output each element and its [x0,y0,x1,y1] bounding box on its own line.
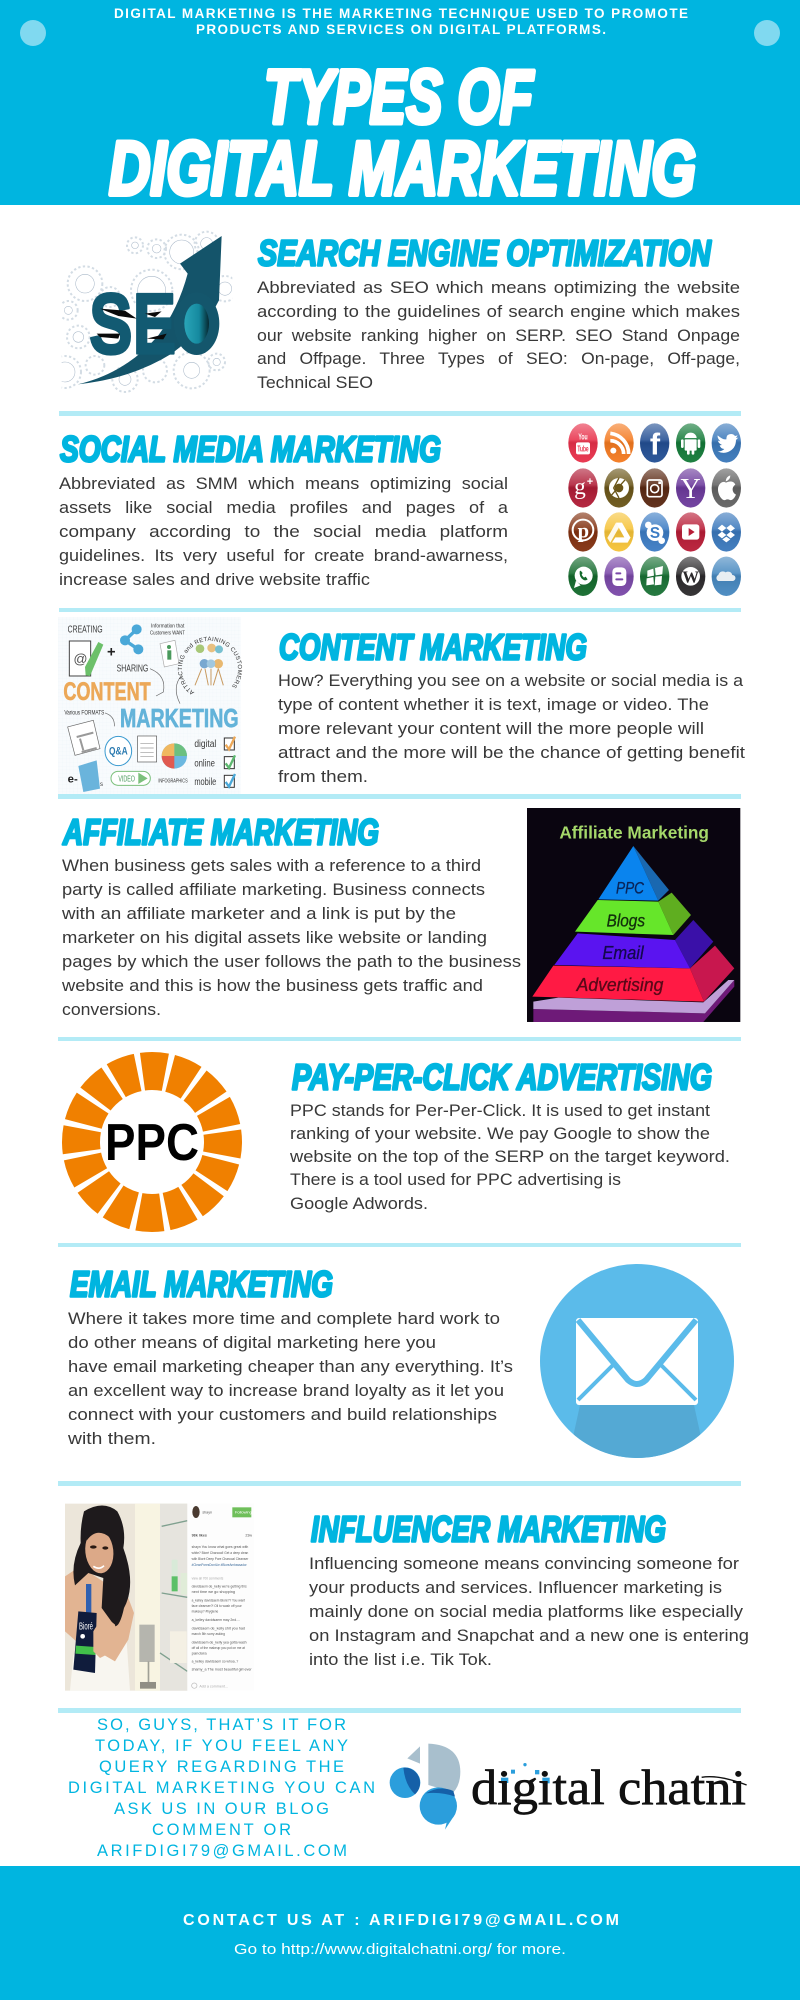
body text [309,1555,749,1669]
icon: rss [604,423,634,463]
body text [289,1102,730,1213]
tier: email [554,920,713,968]
icon: google plus [568,468,598,508]
instagram side panel: shayn [202,1510,212,1514]
image: content marketing sketch: @ [73,651,88,667]
image: content marketing sketch: ATTRACTING and RETAINING CUSTOMERS [178,636,242,694]
product bottle: Bioré [79,1622,93,1633]
intro text [114,6,688,37]
panel: affiliate marketing [61,808,740,1022]
website line: Go to http://www.digitalchatni.org/ for more. [234,1941,566,1958]
icon: google drive [604,512,634,552]
tier: advertising [532,946,734,1002]
body text: Abbreviated as SMM which means optimizing social [59,475,508,493]
panel: influencer marketing [65,1504,749,1691]
body text [257,279,740,392]
image: content marketing sketch: mobile [194,777,217,788]
icon: dropbox [712,512,741,552]
image: content marketing sketch [58,617,242,794]
image: content marketing sketch: Information that [151,624,185,630]
icon: pinterest [568,512,598,552]
instagram side panel: off all of the makeup you put on me at [192,1646,245,1650]
closing message: COMMENT OR [152,1821,291,1839]
icon: blogger [604,557,634,596]
title [109,55,696,212]
logo mark [390,1744,460,1830]
body text: with an affiliate marketer and a link is put by the [61,905,456,923]
panel: search engine optimization [49,232,740,392]
body text: have email marketing cheaper than any everything. It’s [68,1358,513,1376]
tier: blogs [575,893,691,935]
instagram side panel: davidsaem de_kelly shit you had [192,1626,245,1630]
icon: picasa [604,468,634,508]
body text: increase sales and drive website traffic [59,571,370,589]
image: content marketing sketch: + [107,644,116,660]
icon: youtube: You [578,431,588,441]
icon: android [676,423,705,463]
icon: video play [676,512,705,552]
instagram side panel: Add a comment... [199,1684,228,1688]
instagram side panel: 98k likes [192,1533,207,1537]
instagram side panel: shamy_a The most beautiful girl ever [192,1668,252,1672]
image: content marketing sketch: VIDEO [118,774,135,783]
body text: do other means of digital marketing here you [68,1334,436,1352]
icon grid: social networks [568,423,741,596]
closing message: SO, GUYS, THAT’S IT FOR [97,1716,346,1734]
icon: skype [640,512,669,552]
instagram side panel: march 5th sorry asking [192,1632,225,1636]
instagram side panel: a_kelley davidsaem Bioré?? You want [192,1598,245,1602]
icon: twitter [712,423,741,463]
body text: guidelines. Its very useful for create brand-awarness, [59,547,508,565]
instagram side panel: a_kelley davidsaem so whoa..? [192,1659,238,1663]
body text: When business gets sales with a reference to a third [62,857,481,875]
instagram side panel: a_kelley davidsaem may 2nd.... [192,1618,240,1622]
closing message: DIGITAL MARKETING YOU CAN [68,1779,375,1797]
image: content marketing sketch: Q&A [109,746,128,758]
instagram side panel [187,1504,254,1691]
icon: windows [640,557,669,596]
closing message [68,1716,375,1860]
image: content marketing sketch: INFOGRAPHICS [158,779,188,785]
icon: pinterest: p [578,520,589,542]
closing message: QUERY REGARDING THE [99,1758,344,1776]
product bottle [73,1584,97,1673]
body text: type of content whether it is text, image or video. The [278,696,709,714]
bottom tier [533,980,734,1022]
body text: website and this is how the business gets traffic and [61,977,483,995]
icon: facebook: f [650,427,661,461]
body text: How? Everything you see on a website or social media is a [278,672,744,690]
body text: PPC stands for Per-Per-Click. It is used to get instant [290,1102,710,1120]
icon: apple [712,468,741,508]
heading: AFFILIATE MARKETING [62,812,379,852]
icon: youtube: Tube [577,445,589,454]
tier: ppc: PPC [616,879,645,898]
SEO lettering: SE [89,277,176,373]
closing message: ASK US IN OUR BLOG [114,1800,329,1818]
instagram side panel: face cleanser?! Oil to wash off your [192,1604,242,1608]
footer band [0,1866,800,2000]
icon: youtube [568,423,598,463]
intro text: DIGITAL MARKETING IS THE MARKETING TECHNIQUE USED TO PROMOTE [114,6,688,21]
body text: Abbreviated as SEO which means optimizing the website [257,279,740,297]
body text: into the list i.e. Tik Tok. [309,1651,492,1669]
icon: yahoo: Y [681,474,701,505]
image: content marketing sketch: online [194,758,215,769]
icon: wordpress: W [682,567,699,586]
panel: content marketing [58,617,745,794]
image: content marketing sketch: Various FORMATS [64,710,104,717]
decorative dot right [754,20,780,46]
body text: according to the guidelines of search engine which makes [257,303,740,321]
image: influencer instagram post [65,1504,254,1691]
body text [278,672,745,786]
heading: SOCIAL MEDIA MARKETING [60,428,441,470]
panel: pay-per-click advertising [72,1056,730,1222]
instagram side panel: shayn You know what goes great with [192,1545,248,1549]
body text: There is a tool used for PPC advertising is [290,1171,621,1189]
image: content marketing sketch: MARKETING [120,703,239,733]
body text: from them. [278,768,368,786]
body text: website on the top of the SERP on the target keyword. [289,1148,730,1166]
body text: assets like social media profiles and pages of a [59,499,509,517]
body text: mainly done on social media platforms like especially [309,1603,744,1621]
contact line: CONTACT US AT : ARIFDIGI79@GMAIL.COM [183,1912,619,1929]
SEO lettering [90,292,220,356]
icon: google plus: g [574,474,586,500]
image: affiliate marketing pyramid: Affiliate Marketing [559,822,709,842]
instagram side panel: davidsaem de_kelly we're getting this [192,1584,247,1588]
body text: Google Adwords. [290,1195,428,1213]
title: TYPES OF [264,55,535,140]
body text: company according to the social media platform [59,523,508,541]
image: content marketing sketch: CONTENT [63,678,151,706]
body text: with them. [67,1430,156,1448]
body text [67,1310,513,1448]
body text [61,857,521,1019]
instagram side panel: makeup? #hygiene [192,1610,218,1614]
image: content marketing sketch: e- [68,774,78,786]
header band [0,0,800,212]
tier: ppc [598,846,669,901]
icon: email envelope [540,1264,734,1460]
logo dots [501,1763,550,1783]
icon: PPC wheel [72,1062,232,1222]
decorative dot left [20,20,46,46]
image: content marketing sketch: CREATING [68,625,103,636]
image: content marketing sketch: Customers WANT [150,631,186,637]
body text: an excellent way to increase brand loyalty as it let you [68,1382,504,1400]
body text: party is called affiliate marketing. Business connects [62,881,485,899]
body text: marketer on his digital assets like website or landing [62,929,487,947]
icon: instagram [640,468,669,508]
body text: more relevant your content will the more people will [278,720,704,738]
icon: facebook [640,423,669,463]
body text: and Offpage. Three Types of SEO: On-page, Off-page, [257,350,740,368]
instagram side panel: Following [235,1510,252,1515]
person [65,1505,134,1661]
image: content marketing sketch: digital [194,739,216,750]
body text: attract and the more will be the chance of getting benefit [278,744,745,762]
instagram side panel: pandora [192,1652,208,1656]
image: content marketing sketch: SHARING [117,663,148,674]
body text: on Instagram and Snapchat and a new one is entering [309,1627,749,1645]
closing message: ARIFDIGI79@GMAIL.COM [97,1842,347,1860]
arrow [78,236,222,384]
icon: yahoo [676,468,705,508]
heading: EMAIL MARKETING [70,1264,333,1304]
instagram side panel: 23w [245,1533,252,1537]
tier: advertising: Advertising [576,974,664,995]
panel: social media marketing [59,423,741,596]
instagram side panel: white? Bioré Charcoal! Get a deep clean [192,1551,248,1555]
instagram side panel: #CleanPoresDontLie #BioreAmbassador [192,1563,247,1567]
body text: Technical SEO [257,374,373,392]
instagram side panel: davidsaem de_kelly yea gotta wash [192,1640,247,1644]
closing message: TODAY, IF YOU FEEL ANY [95,1737,348,1755]
tier: blogs: Blogs [607,910,645,930]
heading: INFLUENCER MARKETING [311,1508,666,1550]
body text: Where it takes more time and complete hard work to [68,1310,500,1328]
instagram side panel: view all 700 comments [192,1576,223,1580]
panel: email marketing [67,1264,734,1460]
image: SEO gears and arrow [49,232,238,392]
body text: connect with your customers and build relationships [68,1406,497,1424]
icon: PPC wheel: PPC [105,1114,199,1172]
logo: digital chatni [390,1744,747,1830]
body text: your products and services. Influencer marketing is [309,1579,722,1597]
tier: email: Email [602,942,644,963]
icon: cloud [712,557,741,596]
icon: google plus: + [587,476,593,488]
image: content marketing sketch: s [100,782,103,788]
body text: pages by which the user follows the path to the business [62,953,521,971]
logo wordmark: digital chatni [471,1759,746,1815]
image: affiliate marketing pyramid [527,808,740,1022]
body text: ranking of your website. We pay Google to show the [290,1125,710,1143]
body text: Influencing someone means convincing someone for [309,1555,740,1573]
body text: conversions. [62,1001,161,1019]
icon: skype: S [650,525,660,542]
intro text: PRODUCTS AND SERVICES ON DIGITAL PLATFORMS. [196,22,606,37]
body text: our website ranking higher on SERP. SEO Stand Onpage [257,327,740,345]
instagram side panel: with Bioré Deep Pore Charcoal Cleanser [192,1557,249,1561]
instagram side panel: next time we go shopping [192,1590,235,1594]
heading: CONTENT MARKETING [279,626,587,668]
icon: wordpress [676,557,705,596]
icon: whatsapp [568,557,598,596]
body text [59,475,509,589]
